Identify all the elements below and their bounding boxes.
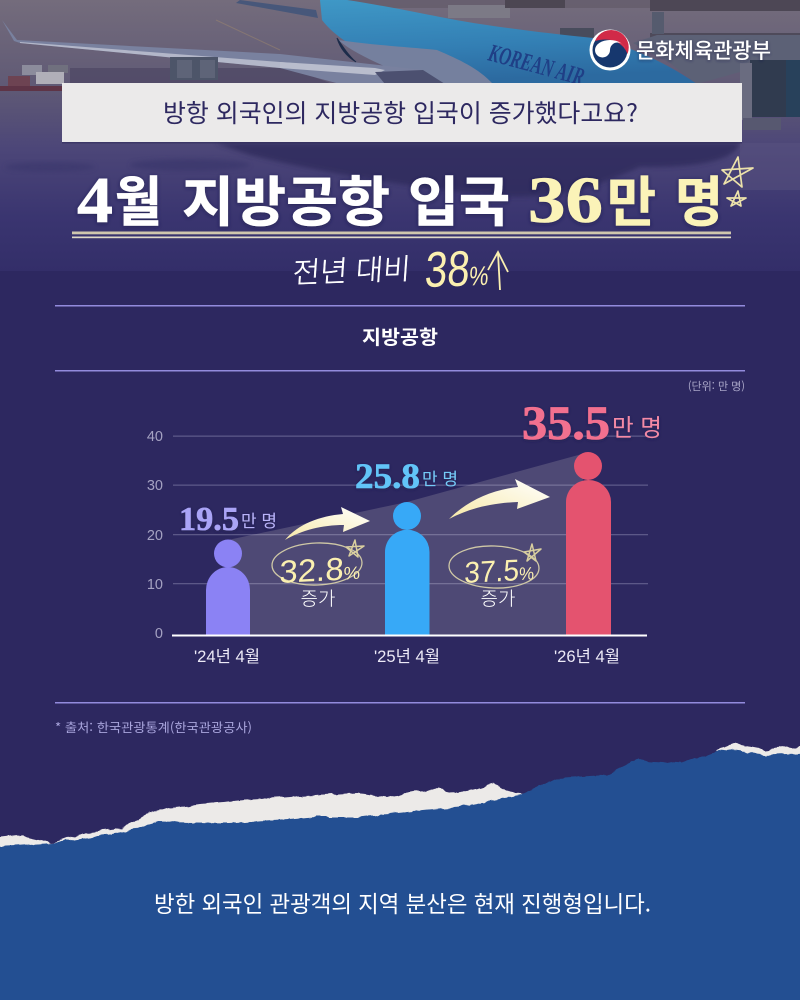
value label: 19.5 <box>179 501 277 538</box>
callout: 37.5% increase: 37.5% <box>464 553 535 590</box>
main title: 월 <box>115 158 162 237</box>
y axis labels: 20 <box>147 528 163 544</box>
torn paper white edge <box>0 744 800 860</box>
ministry logo <box>590 30 771 70</box>
torn paper blue area <box>0 750 800 1000</box>
x axis labels: '24년 4월 <box>194 647 260 666</box>
person bar: 2026 <box>566 452 611 635</box>
bottom divider <box>55 702 745 704</box>
chart: regional airport arrivals <box>147 397 662 666</box>
plane shadow on ground <box>215 143 740 197</box>
value label: 25.8: 25.8 <box>355 456 420 496</box>
jet bridge <box>633 12 800 130</box>
background photo: airplane at airport <box>0 0 800 271</box>
wing <box>2 20 445 84</box>
person bar: 2025 <box>385 502 430 635</box>
icon: up arrow <box>488 252 508 290</box>
ministry name: 문화체육관광부 <box>636 35 771 65</box>
y axis labels: 40 <box>147 429 163 445</box>
callout: 32.8% increase <box>271 540 364 611</box>
rear stabilizer <box>236 0 318 18</box>
y axis labels <box>147 429 163 642</box>
unit note: (단위: 만 명) <box>688 378 745 394</box>
baseline <box>172 634 647 636</box>
title double underline <box>72 232 731 238</box>
baggage carts <box>0 65 68 91</box>
fuselage belly <box>338 40 493 84</box>
main title: 입국 <box>408 158 510 237</box>
subtitle: compared to last year: 전년 대비 <box>291 246 412 292</box>
callout: 32.8% increase: 증가 <box>301 584 335 611</box>
value label: 35.5: 만 명 <box>612 408 662 443</box>
callout: 37.5% increase <box>448 544 541 611</box>
value label: 25.8 <box>355 456 458 496</box>
y axis labels: 10 <box>147 577 163 593</box>
main title: 지방공항 <box>182 158 390 237</box>
airline name on fuselage: KOREAN AIR <box>485 40 587 91</box>
banner question text: 방항 외국인의 지방공항 입국이 증가했다고요? <box>163 94 638 130</box>
value label: 19.5: 19.5 <box>179 501 239 538</box>
main title: 36 <box>528 164 603 237</box>
y axis labels: 0 <box>155 626 163 642</box>
value label: 25.8: 만 명 <box>422 465 458 490</box>
person bar: 2024 <box>206 540 250 635</box>
terminal equipment top right <box>345 0 800 47</box>
heading: regional airports: 지방공항 <box>362 321 438 350</box>
icon: taegeuk emblem <box>590 30 630 70</box>
value label: 19.5: 만 명 <box>241 507 277 532</box>
torn paper bottom section <box>0 744 800 1000</box>
x axis labels <box>194 647 620 666</box>
x axis labels: '25년 4월 <box>374 647 440 666</box>
value label: 35.5: 35.5 <box>522 397 610 450</box>
source note: * 출처: 한국관광통계(한국관광공사) <box>55 717 252 736</box>
main title: 4 <box>77 164 113 237</box>
arrow: 2024 to 2025 <box>285 507 370 540</box>
fuselage <box>320 0 697 84</box>
gridlines <box>173 436 648 584</box>
value label: 35.5 <box>522 397 662 450</box>
main title: 명 <box>675 158 723 237</box>
subtitle: compared to last year <box>291 240 508 298</box>
arrow: 2025 to 2026 <box>449 479 550 519</box>
main title <box>77 158 723 237</box>
y axis labels: 30 <box>147 478 163 494</box>
closing statement: 방한 외국인 관광객의 지역 분산은 현재 진행형입니다. <box>154 885 651 919</box>
callout: 37.5% increase: 증가 <box>481 584 515 611</box>
icon: title stars <box>722 157 753 206</box>
trend shade <box>228 454 588 635</box>
subtitle: compared to last year: 38% <box>423 240 491 298</box>
x axis labels: '26년 4월 <box>554 647 620 666</box>
cargo containers <box>170 57 218 80</box>
callout: 32.8% increase: 32.8% <box>279 550 361 590</box>
question banner <box>62 83 742 144</box>
main title: 만 <box>607 158 656 237</box>
